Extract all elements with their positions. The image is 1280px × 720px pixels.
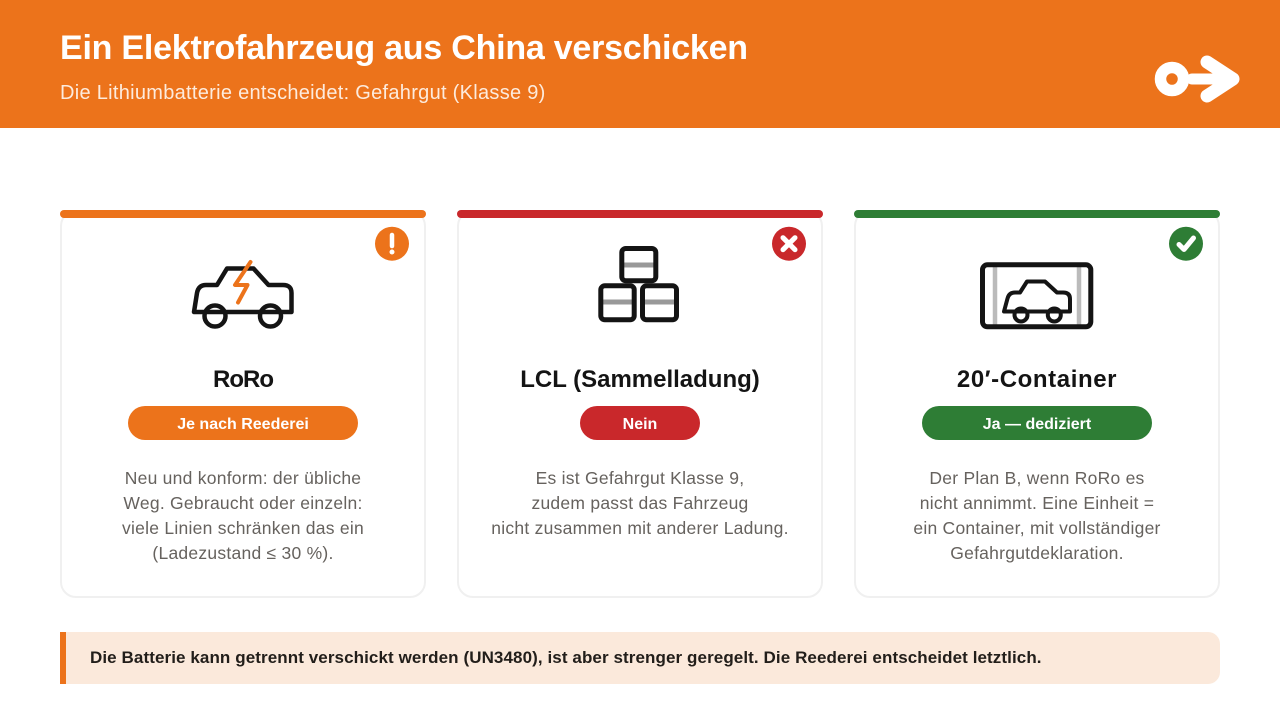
description text: Gefahrgutdeklaration. [950,543,1124,563]
icon: key arrow logo [1154,56,1240,102]
status pill [580,406,700,440]
description text [491,468,789,538]
description text: (Ladezustand ≤ 30 %). [152,543,334,563]
subtitle: Die Lithiumbatterie entscheidet: Gefahrgut (Klasse 9) [60,82,546,104]
heading: RoRo: RoRo [213,366,273,393]
status pill: Ja — dediziert [983,416,1091,433]
icon: cross badge [772,227,806,261]
description text: zudem passt das Fahrzeug [531,493,749,513]
callout note [60,632,1220,684]
icon: check badge [1169,227,1203,261]
description text: nicht annimmt. Eine Einheit = [920,493,1154,513]
callout accent [60,632,66,684]
heading: LCL: LCL (Sammelladung) [520,366,760,393]
card body [457,210,823,598]
card accent bar [60,210,426,218]
description text: Es ist Gefahrgut Klasse 9, [536,468,744,488]
description text: Der Plan B, wenn RoRo es [929,468,1145,488]
description text: nicht zusammen mit anderer Ladung. [491,518,789,538]
callout text: Die Batterie kann getrennt verschickt werden (UN3480), ist aber strenger geregelt. Die Reederei entscheidet letztlich. [90,648,1042,667]
description text: Neu und konform: der übliche [125,468,361,488]
description text: Weg. Gebraucht oder einzeln: [123,493,363,513]
title: Ein Elektrofahrzeug aus China verschicken [60,29,748,67]
card body [854,210,1220,598]
icon: stacked boxes [600,248,677,320]
panel: LCL [457,210,823,598]
panel: RoRo [60,210,426,598]
status pill [128,406,358,440]
header band [0,0,1280,128]
icon: car in container [982,265,1091,327]
description text: ein Container, mit vollständiger [913,518,1161,538]
status pill: Je nach Reederei [177,416,309,433]
description text [913,468,1161,563]
icon: electric car [194,262,292,326]
status pill [922,406,1152,440]
panel: 20ft container [854,210,1220,598]
card accent bar [854,210,1220,218]
icon: warning badge [375,227,409,261]
description text: viele Linien schränken das ein [122,518,364,538]
card accent bar [457,210,823,218]
status pill: Nein [623,416,657,433]
card body [60,210,426,598]
description text [122,468,364,563]
heading: container: 20′-Container [957,366,1117,393]
